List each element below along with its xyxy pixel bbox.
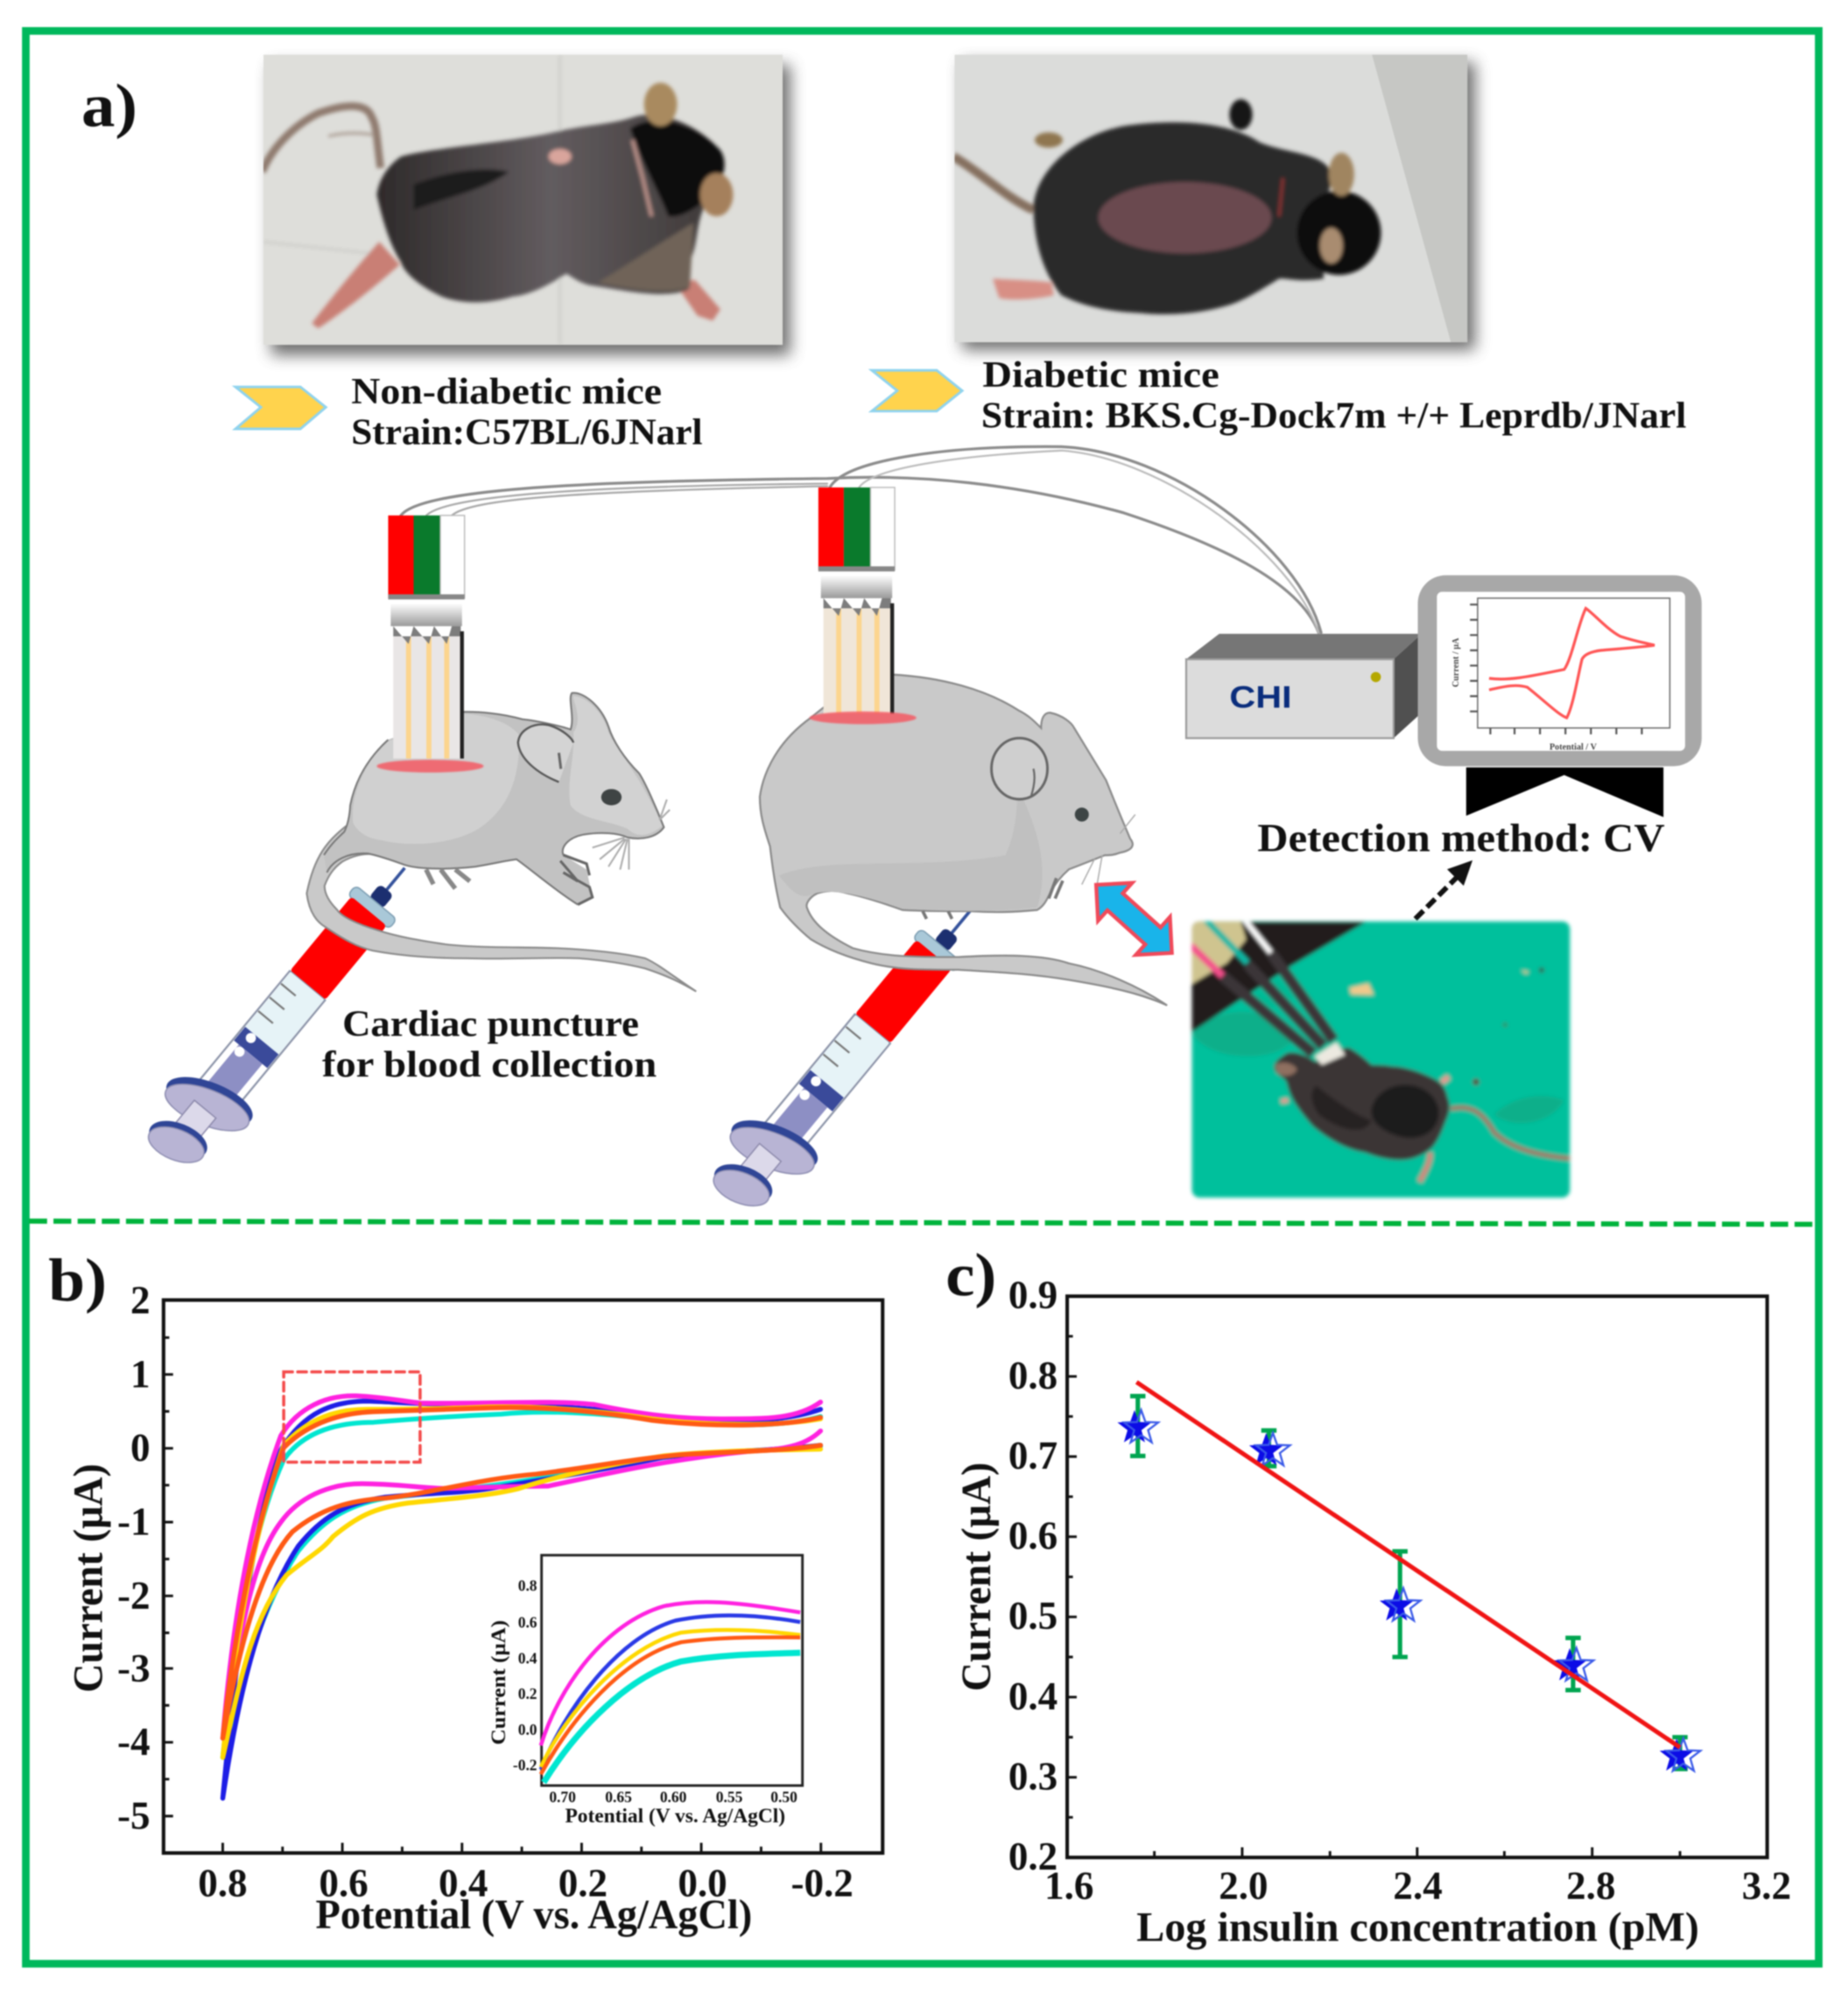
panel b label: b) (48, 1247, 107, 1315)
label: cardiac puncture: Cardiac puncture (342, 1004, 639, 1045)
electrode body (393, 626, 462, 759)
inset y labels: 0.8 (518, 1577, 538, 1595)
x tick labels (1044, 1863, 1791, 1907)
x tick labels: -0.2 (791, 1861, 854, 1905)
y tick labels: 0.5 (1008, 1594, 1058, 1638)
main CV chart (65, 1279, 882, 1938)
x tick labels: 2.0 (1219, 1863, 1268, 1907)
inset y axis title: Current (μA) (488, 1620, 510, 1744)
inset y labels: -0.2 (513, 1757, 538, 1774)
inset x labels (549, 1788, 798, 1806)
photo: non-diabetic mouse (262, 55, 790, 355)
monitor with CV curve (1418, 575, 1702, 766)
monitor axis labels: Potential / V (1549, 742, 1598, 752)
working electrode tubes (819, 488, 895, 598)
y tick labels (1008, 1274, 1058, 1878)
mouse 1 syringe (122, 835, 443, 1195)
x tick labels: 0.0 (678, 1861, 727, 1905)
inset x labels: 0.70 (549, 1788, 576, 1806)
y tick labels: -4 (117, 1720, 151, 1764)
panel c (945, 1242, 1791, 1950)
x tick labels (198, 1861, 854, 1905)
error bars (1130, 1396, 1688, 1769)
y tick labels: -5 (117, 1793, 151, 1837)
fit line (1136, 1382, 1680, 1747)
inset y labels: 0.0 (518, 1721, 538, 1738)
inset x labels: 0.65 (605, 1788, 632, 1806)
inset x labels: 0.55 (716, 1788, 743, 1806)
inset x labels: 0.50 (770, 1788, 798, 1806)
working electrode tubes (388, 516, 465, 626)
CV curve (1489, 608, 1655, 718)
y tick labels: -3 (117, 1646, 151, 1690)
mouse 2 illustration (760, 675, 1167, 1006)
label: non-diabetic mice: Strain:C57BL/6JNarl (351, 411, 703, 453)
mouse 1 body (324, 693, 670, 904)
y axis title: Current (μA) (65, 1463, 111, 1693)
label: diabetic mice: Diabetic mice (982, 354, 1219, 396)
icon: chevron non-diabetic (235, 387, 326, 429)
x tick labels: 3.2 (1742, 1863, 1791, 1907)
inset x labels: 0.60 (660, 1788, 687, 1806)
y tick labels: 0.3 (1008, 1754, 1058, 1798)
x tick labels: 2.8 (1566, 1863, 1615, 1907)
label: diabetic mice: Strain: BKS.Cg-Dock7m +/+ Leprdb/JNarl (981, 396, 1686, 437)
inset y labels: 0.4 (518, 1649, 538, 1667)
label: non-diabetic mice: Non-diabetic mice (351, 371, 662, 412)
y tick labels (117, 1279, 151, 1837)
x tick labels: 0.2 (559, 1861, 608, 1905)
x tick labels: 0.6 (319, 1861, 369, 1905)
contact patch (810, 712, 917, 724)
x tick labels: 0.4 (439, 1861, 488, 1905)
label: cardiac puncture (322, 1004, 657, 1085)
inset y labels: 0.2 (518, 1685, 538, 1702)
monitor axis labels: Current / μA (1451, 637, 1461, 687)
x tick labels: 0.8 (198, 1861, 248, 1905)
inset x axis title: Potential (V vs. Ag/AgCl) (566, 1805, 785, 1828)
inset curves (541, 1602, 800, 1782)
y tick labels: 0 (130, 1426, 151, 1470)
x tick labels: 1.6 (1044, 1863, 1093, 1907)
CV curves (222, 1372, 820, 1798)
photo: mouse with electrodes on teal sheet (1191, 916, 1570, 1200)
y tick labels: 0.8 (1008, 1353, 1058, 1397)
label: diabetic mice (981, 354, 1686, 437)
y axis title: Current (μA) (953, 1463, 1000, 1691)
panel c label: c) (945, 1242, 996, 1309)
inset y labels: 0.6 (518, 1614, 538, 1632)
CHI label: CHI (1229, 680, 1292, 714)
monitor axis labels (1451, 637, 1598, 752)
y tick labels: 2 (130, 1279, 151, 1323)
mouse 1 tail (306, 826, 696, 992)
photo: diabetic mouse (953, 55, 1475, 350)
dashed divider between panels (29, 1221, 1816, 1225)
data points (1117, 1410, 1700, 1771)
y tick labels: 0.6 (1008, 1514, 1058, 1558)
y tick labels: 0.4 (1008, 1674, 1058, 1718)
inset chart (488, 1555, 803, 1828)
label: detection method: Detection method: CV (1257, 817, 1665, 860)
electrode set 1 (376, 516, 483, 773)
monitor stand (1466, 768, 1663, 817)
y tick labels: -1 (117, 1500, 151, 1544)
electrode body (824, 598, 892, 714)
mouse 2 syringe (686, 879, 1008, 1238)
arrow: dashed to detection (1416, 860, 1472, 919)
contact patch (376, 760, 483, 773)
label: non-diabetic mice (351, 371, 703, 453)
panel a (81, 55, 1702, 1238)
panel a label: a) (81, 73, 137, 140)
panel b (48, 1247, 882, 1938)
y tick labels: 0.9 (1008, 1274, 1058, 1317)
inset y labels (513, 1577, 538, 1774)
zoom region marker (284, 1372, 420, 1462)
mouse 1 illustration (306, 693, 696, 992)
icon: chevron diabetic (872, 370, 962, 411)
y tick labels: 0.2 (1008, 1835, 1058, 1878)
wires to potentiostat (401, 446, 1321, 633)
label: cardiac puncture: for blood collection (322, 1044, 657, 1085)
x tick labels: 2.4 (1393, 1863, 1443, 1907)
calibration chart (953, 1274, 1791, 1950)
y tick labels: -2 (117, 1574, 151, 1618)
x axis title: Log insulin concentration (pM) (1136, 1904, 1699, 1950)
electrode set 2 (810, 488, 917, 724)
potentiostat CHI box (1186, 634, 1422, 738)
y tick labels: 1 (130, 1352, 151, 1396)
x axis title: Potential (V vs. Ag/AgCl) (316, 1891, 752, 1938)
y tick labels: 0.7 (1008, 1434, 1058, 1477)
arrow: double blue (1079, 866, 1189, 972)
